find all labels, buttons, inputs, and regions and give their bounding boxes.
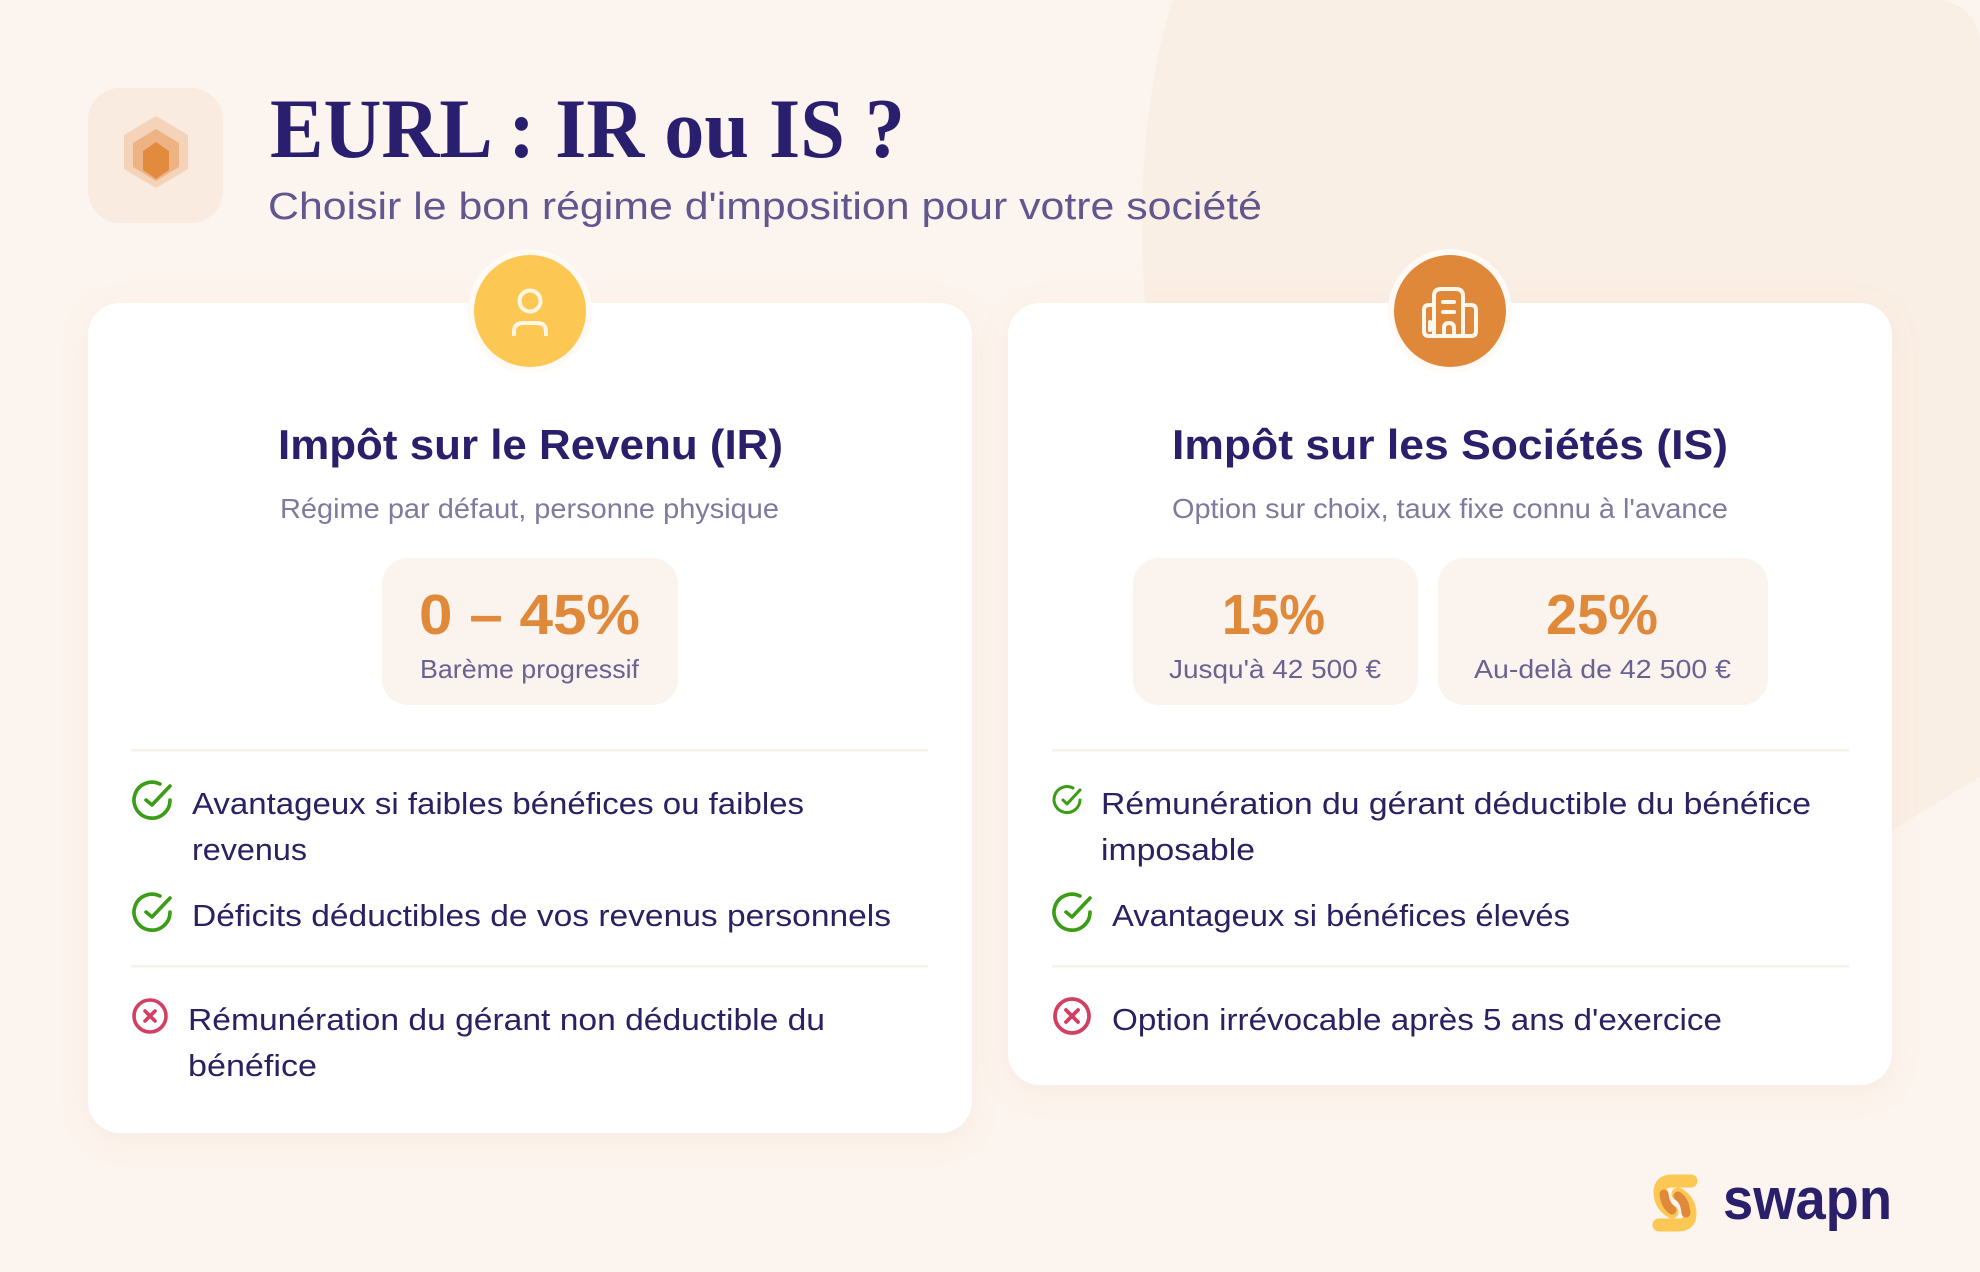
icon: check [1054,894,1090,930]
advantage text: revenus [192,832,307,867]
icon: header hexagon tile [88,88,223,223]
heading: IR: Impôt sur le Revenu (IR) [278,421,783,468]
advantage text: imposable [1101,832,1255,867]
advantage text: Avantageux si bénéfices élevés [1112,898,1570,933]
subtitle: Choisir le bon régime d'imposition pour votre société [268,186,1262,228]
rate box: 15% [1133,558,1418,705]
drawback text: Rémunération du gérant non déductible du [188,1002,825,1037]
icon: check [134,782,170,818]
icon: building [1388,249,1512,373]
rate box: 25%: 25% [1546,583,1658,647]
logo: swapn: swapn [1723,1167,1892,1232]
rate box: 25% [1438,558,1768,705]
rate box: 0 – 45%: 0 – 45% [419,583,640,647]
description: IS: Option sur choix, taux fixe connu à l'avance [1172,493,1728,524]
drawback text [188,1002,825,1083]
drawback text: bénéfice [188,1048,317,1083]
logo: swapn [1659,1167,1892,1232]
heading: IS: Impôt sur les Sociétés (IS) [1172,421,1728,468]
drawback text: Option irrévocable après 5 ans d'exercice [1112,1002,1722,1037]
panel: IR [88,249,972,1133]
advantage text: Rémunération du gérant déductible du bénéfice [1101,786,1811,821]
rate box: 0 – 45%: Barème progressif [420,654,640,684]
advantage text [1101,786,1811,867]
icon: cross [134,1000,166,1032]
rate box: 25%: Au-delà de 42 500 € [1474,654,1732,684]
advantage text: Avantageux si faibles bénéfices ou faibles [192,786,804,821]
rate box: 0 – 45% [382,558,678,705]
icon: person [468,249,592,373]
advantage text [192,786,804,867]
rate box: 15%: 15% [1222,583,1325,647]
icon: check small [1054,787,1080,813]
description: IR: Régime par défaut, personne physique [280,493,779,524]
icon: check [134,894,170,930]
advantage text: Déficits déductibles de vos revenus personnels [192,898,891,933]
title: EURL : IR ou IS ? [270,82,905,176]
icon: cross [1055,999,1089,1033]
rate box: 15%: Jusqu'à 42 500 € [1169,654,1382,684]
panel: IS [1008,249,1892,1085]
